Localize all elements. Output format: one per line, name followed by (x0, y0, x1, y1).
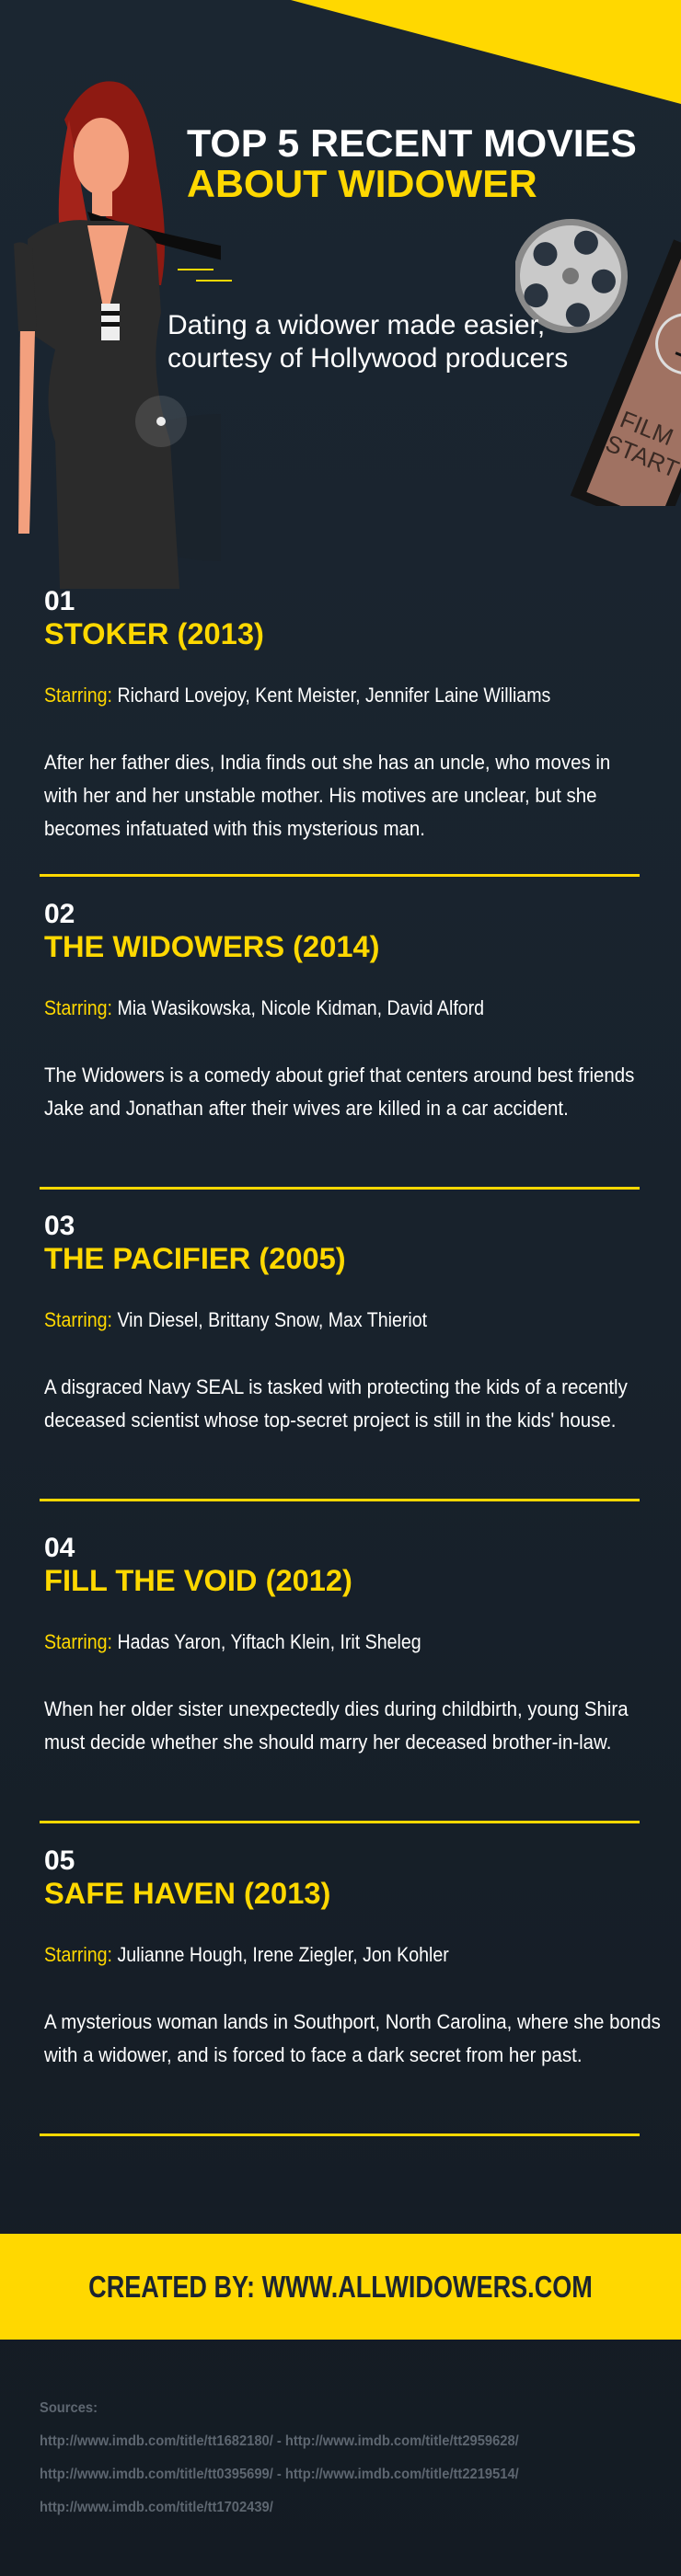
movie 03 (44, 1211, 628, 1432)
yellow corner triangle (291, 0, 681, 104)
movie 05: 05 (44, 1846, 75, 1876)
movie 02: Jake and Jonathan after their wives are killed in a car accident. (44, 1097, 569, 1120)
movie 01: 01 (44, 586, 75, 616)
sources (40, 2400, 519, 2515)
movie 01: with her and her unstable mother. His motives are unclear, but she (44, 784, 596, 807)
movie 02: The Widowers is a comedy about grief that centers around best friends (44, 1064, 634, 1087)
title: TOP 5 RECENT MOVIES (187, 121, 637, 165)
title: ABOUT WIDOWER (187, 162, 537, 205)
subtitle: Dating a widower made easier, (167, 310, 545, 340)
movie 05 (44, 1846, 661, 2066)
movie 01: Starring: Richard Lovejoy, Kent Meister, Jennifer Laine Williams (44, 684, 550, 707)
subtitle: courtesy of Hollywood producers (167, 343, 568, 374)
movie 01 (44, 586, 610, 840)
movie 01: After her father dies, India finds out she has an uncle, who moves in (44, 751, 610, 774)
illustration: film reel and strip (515, 219, 681, 506)
footer credit band: CREATED BY: WWW.ALLWIDOWERS.COM (88, 2270, 593, 2304)
movie 04: FILL THE VOID (2012) (44, 1564, 352, 1597)
movie 03: A disgraced Navy SEAL is tasked with protecting the kids of a recently (44, 1375, 628, 1398)
movie 04: When her older sister unexpectedly dies during childbirth, young Shira (44, 1697, 629, 1720)
movie 04: 04 (44, 1533, 75, 1563)
movie 02 (44, 899, 634, 1120)
footer credit band (0, 2234, 681, 2340)
movie 05: with a widower, and is forced to face a dark secret from her past. (44, 2043, 583, 2066)
illustration: film reel and strip: START (602, 429, 681, 483)
subtitle (167, 310, 568, 374)
movie 01: becomes infatuated with this mysterious man. (44, 817, 425, 840)
sources: Sources: (40, 2400, 98, 2416)
title (187, 121, 637, 205)
movie 04: Starring: Hadas Yaron, Yiftach Klein, Irit Sheleg (44, 1630, 421, 1653)
movie 01: STOKER (2013) (44, 617, 264, 650)
movie 03: deceased scientist whose top-secret project is still in the kids' house. (44, 1409, 616, 1432)
movie 03: 03 (44, 1211, 75, 1241)
illustration: film reel and strip: FILM (617, 405, 677, 451)
illustration: woman (14, 81, 221, 589)
movie 03: Starring: Vin Diesel, Brittany Snow, Max Thieriot (44, 1308, 427, 1331)
movie 02: Starring: Mia Wasikowska, Nicole Kidman, David Alford (44, 996, 484, 1019)
movie 05: SAFE HAVEN (2013) (44, 1877, 330, 1910)
movie 05: Starring: Julianne Hough, Irene Ziegler, Jon Kohler (44, 1943, 449, 1966)
movie 04: must decide whether she should marry her deceased brother-in-law. (44, 1731, 611, 1754)
sources: http://www.imdb.com/title/tt0395699/ - http://www.imdb.com/title/tt2219514/ (40, 2467, 519, 2482)
sources: http://www.imdb.com/title/tt1682180/ - http://www.imdb.com/title/tt2959628/ (40, 2433, 519, 2449)
movie 05: A mysterious woman lands in Southport, North Carolina, where she bonds (44, 2010, 661, 2033)
movie 02: 02 (44, 899, 75, 929)
sources: http://www.imdb.com/title/tt1702439/ (40, 2500, 273, 2515)
movie 04 (44, 1533, 629, 1754)
movie 03: THE PACIFIER (2005) (44, 1242, 346, 1275)
decorative yellow dashes (178, 269, 214, 270)
movie 02: THE WIDOWERS (2014) (44, 930, 380, 963)
